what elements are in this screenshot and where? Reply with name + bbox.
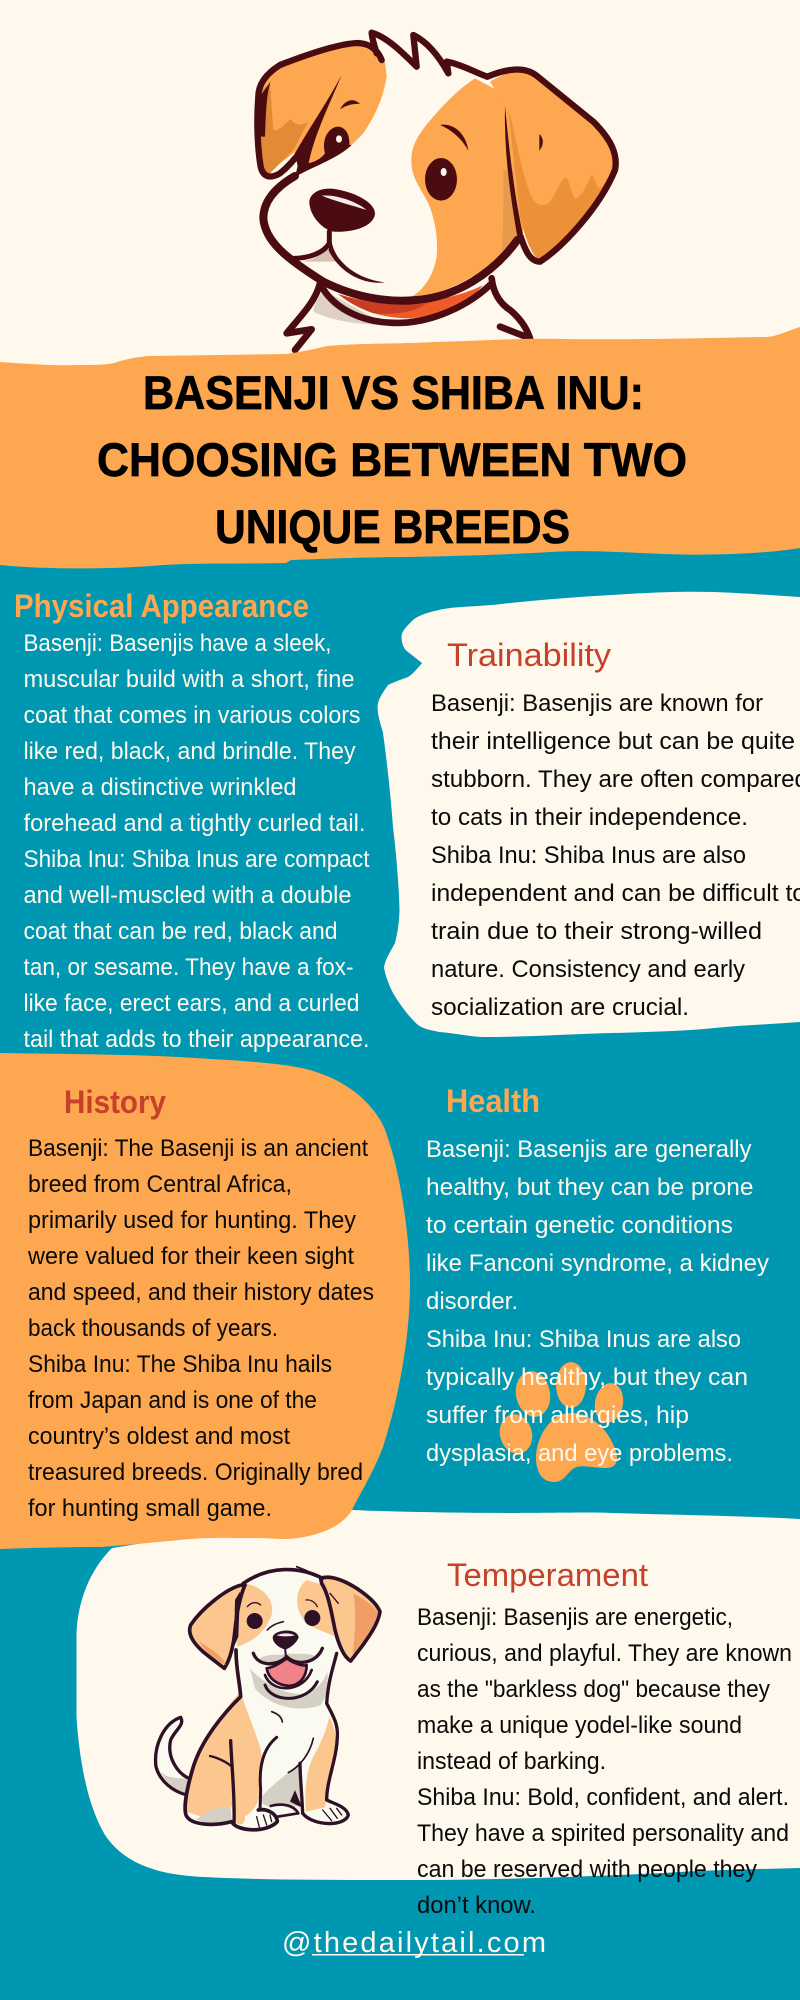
body text: disorder. <box>426 1288 518 1315</box>
orange torn band <box>0 327 800 568</box>
heading: Trainability <box>447 637 611 673</box>
body text: Basenji: Basenjis have a sleek, <box>24 630 332 657</box>
body text: tail that adds to their appearance. <box>24 1026 370 1053</box>
body text <box>24 630 370 1053</box>
icon: paw print <box>495 1362 626 1482</box>
body text <box>417 1604 792 1919</box>
body text: coat that can be red, black and <box>24 918 338 945</box>
title: BASENJI VS SHIBA INU: <box>143 366 644 419</box>
illustration: dog head <box>257 33 617 350</box>
body text: to certain genetic conditions <box>426 1212 733 1239</box>
body text: muscular build with a short, fine <box>24 666 354 693</box>
body text <box>426 1136 769 1467</box>
body text: don’t know. <box>417 1892 536 1919</box>
heading: Health <box>446 1083 540 1119</box>
illustration: sitting puppy <box>156 1567 380 1830</box>
body text: for hunting small game. <box>28 1495 272 1522</box>
body text: train due to their strong-willed <box>431 918 762 945</box>
body text: can be reserved with people they <box>417 1856 757 1883</box>
body text <box>27 1135 374 1522</box>
body text: like face, erect ears, and a curled <box>24 990 360 1017</box>
footer handle: @thedailytail.com <box>282 1927 546 1959</box>
body text: and speed, and their history dates <box>28 1279 374 1306</box>
body text: typically healthy, but they can <box>426 1364 748 1391</box>
body text: coat that comes in various colors <box>24 702 360 729</box>
title: CHOOSING BETWEEN TWO <box>97 433 687 486</box>
body text: to cats in their independence. <box>431 804 748 831</box>
panel: title band <box>0 327 800 568</box>
body text: and well-muscled with a double <box>24 882 352 909</box>
heading: History <box>64 1084 166 1120</box>
panel: history <box>0 1053 410 1549</box>
body text: instead of barking. <box>417 1748 606 1775</box>
body text: Basenji: Basenjis are generally <box>426 1136 752 1163</box>
body text: They have a spirited personality and <box>417 1820 789 1847</box>
body text: have a distinctive wrinkled <box>24 774 296 801</box>
body text: healthy, but they can be prone <box>426 1174 754 1201</box>
body text: forehead and a tightly curled tail. <box>24 810 366 837</box>
body text: make a unique yodel-like sound <box>417 1712 742 1739</box>
body text: their intelligence but can be quite <box>431 728 795 755</box>
body text: breed from Central Africa, <box>28 1171 292 1198</box>
body text: as the "barkless dog" because they <box>417 1676 770 1703</box>
heading: Temperament <box>447 1557 648 1593</box>
body text <box>431 690 800 1021</box>
cream blob <box>378 592 800 1037</box>
body text: independent and can be difficult to <box>431 880 800 907</box>
body text: nature. Consistency and early <box>431 956 745 983</box>
title: UNIQUE BREEDS <box>215 500 570 553</box>
panel: temperament blob <box>76 1510 800 1880</box>
body text: Basenji: Basenjis are known for <box>431 690 763 717</box>
body text: like red, black, and brindle. They <box>24 738 356 765</box>
body text: from Japan and is one of the <box>28 1387 317 1414</box>
panel: health <box>426 1083 769 1467</box>
teal background <box>0 530 800 2000</box>
heading: Physical Appearance <box>14 588 309 624</box>
body text: stubborn. They are often compared <box>431 766 800 793</box>
body text: Shiba Inu: The Shiba Inu hails <box>28 1351 332 1378</box>
body text: primarily used for hunting. They <box>28 1207 356 1234</box>
body text: Shiba Inu: Shiba Inus are also <box>426 1326 741 1353</box>
orange blob <box>0 1053 410 1549</box>
body text: Shiba Inu: Shiba Inus are also <box>431 842 746 869</box>
cream top background <box>0 0 800 400</box>
title <box>97 366 687 553</box>
body text: were valued for their keen sight <box>27 1243 354 1270</box>
body text: treasured breeds. Originally bred <box>28 1459 363 1486</box>
panel: temperament <box>417 1557 792 1919</box>
body text: country’s oldest and most <box>28 1423 290 1450</box>
body text: Shiba Inu: Shiba Inus are compact <box>24 846 370 873</box>
body text: like Fanconi syndrome, a kidney <box>426 1250 769 1277</box>
body text: Shiba Inu: Bold, confident, and alert. <box>417 1784 789 1811</box>
body text: Basenji: The Basenji is an ancient <box>28 1135 368 1162</box>
body text: tan, or sesame. They have a fox- <box>24 954 354 981</box>
body text: back thousands of years. <box>28 1315 278 1342</box>
body text: socialization are crucial. <box>431 994 689 1021</box>
body text: dysplasia, and eye problems. <box>426 1440 733 1467</box>
body text: suffer from allergies, hip <box>426 1402 689 1429</box>
panel: physical appearance <box>14 588 370 1053</box>
body text: Basenji: Basenjis are energetic, <box>417 1604 733 1631</box>
body text: curious, and playful. They are known <box>417 1640 792 1667</box>
panel: trainability <box>378 592 800 1037</box>
